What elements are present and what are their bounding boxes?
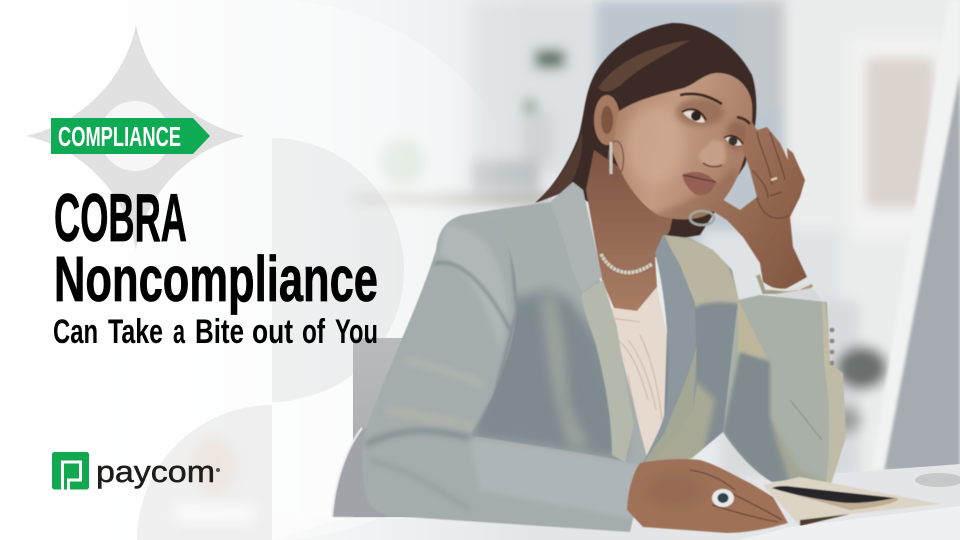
title: COBRA (54, 180, 187, 256)
hair (535, 23, 756, 240)
category tag (51, 118, 210, 154)
dark cabinet panel (353, 338, 413, 517)
subtitle (53, 313, 378, 351)
subtitle: Take (108, 313, 163, 351)
jacket torso left (464, 202, 647, 465)
logo mark (52, 452, 89, 490)
hoop earrings (608, 141, 714, 225)
left lapel (582, 280, 634, 462)
hand on desk (627, 459, 788, 533)
smartphone (771, 486, 898, 510)
notebook (763, 477, 940, 526)
subtitle: Can (53, 313, 98, 351)
subtitle: You (335, 313, 378, 351)
raised hand (708, 122, 807, 292)
right torso (652, 234, 739, 461)
ring (712, 489, 734, 507)
right sleeve (720, 290, 850, 490)
title: Noncompliance (54, 243, 378, 315)
title (54, 180, 378, 315)
computer monitor (872, 0, 960, 470)
collar (550, 182, 602, 292)
decorative circle segments (2, 0, 542, 540)
computer mouse (915, 473, 960, 487)
left sleeve (366, 214, 638, 532)
subtitle: out (252, 313, 293, 351)
right lapel (640, 235, 697, 468)
subtitle: a (173, 313, 186, 351)
keyboard (740, 506, 960, 540)
registered mark (216, 468, 220, 472)
subtitle: Bite (195, 313, 244, 351)
chair (332, 428, 385, 517)
white fade over left side (0, 0, 530, 540)
woman at desk (332, 23, 940, 540)
face (612, 72, 753, 220)
wordmark: paycom (96, 454, 215, 489)
subtitle: of (302, 313, 325, 351)
eyes, brows, nose and mouth (680, 94, 750, 195)
decorative diamond star (26, 25, 245, 250)
ear (594, 95, 620, 145)
desk (130, 464, 960, 540)
neck and chest (586, 150, 675, 311)
category tag: COMPLIANCE (58, 121, 181, 152)
necklace (601, 254, 652, 273)
cuff buttons (830, 328, 834, 365)
paycom logo (52, 452, 220, 490)
sweater (610, 287, 668, 465)
watch and bracelet (758, 275, 822, 301)
